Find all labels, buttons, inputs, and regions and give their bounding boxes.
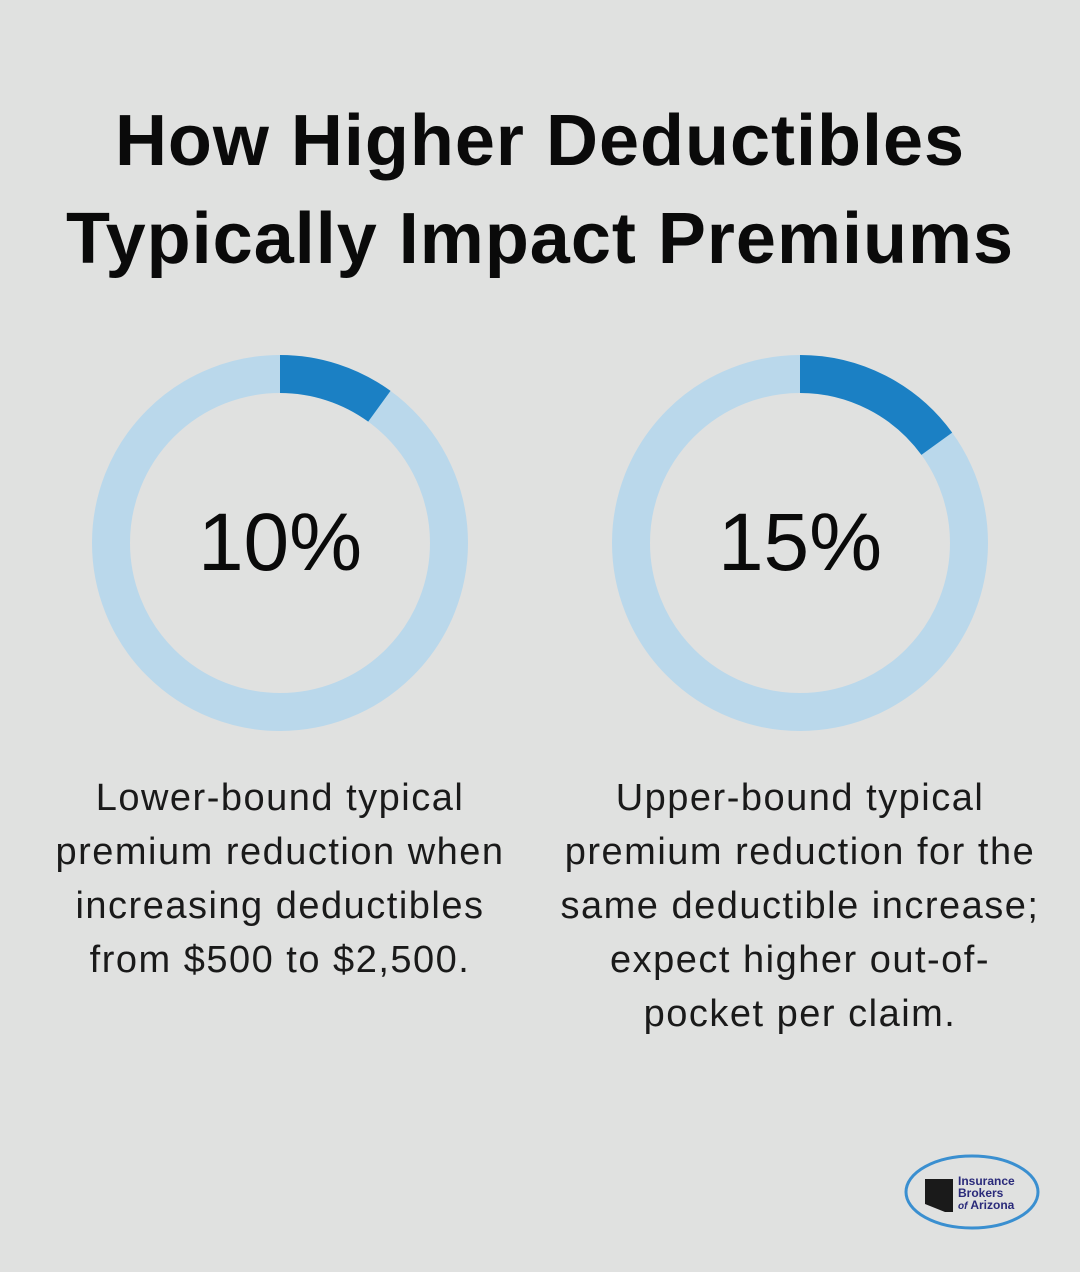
text: upper bound description: Upper-bound typical [616,777,984,819]
text: upper bound description: same deductible increase; [560,885,1039,927]
text: lower bound description: from $500 to $2,500. [90,939,470,981]
text: lower bound description [55,777,505,981]
donut: 15%: 15% [718,497,882,588]
title [66,101,1014,279]
text: lower bound description: increasing deductibles [75,885,484,927]
logo: of Arizona [958,1198,1015,1212]
text: upper bound description: premium reduction for the [565,831,1035,873]
donut: 10% [92,355,468,731]
logo [904,1154,1040,1230]
donut: 15% [612,355,988,731]
title: Typically Impact Premiums [66,199,1014,279]
text: upper bound description: expect higher out-of- [610,939,990,981]
logo: Insurance [958,1174,1015,1188]
text: upper bound description: pocket per claim. [644,993,956,1035]
text: lower bound description: premium reduction when [55,831,505,873]
text: lower bound description: Lower-bound typical [96,777,464,819]
logo: Brokers [958,1186,1004,1200]
text: upper bound description [560,777,1039,1035]
title: How Higher Deductibles [115,101,965,181]
donut: 10%: 10% [198,497,362,588]
